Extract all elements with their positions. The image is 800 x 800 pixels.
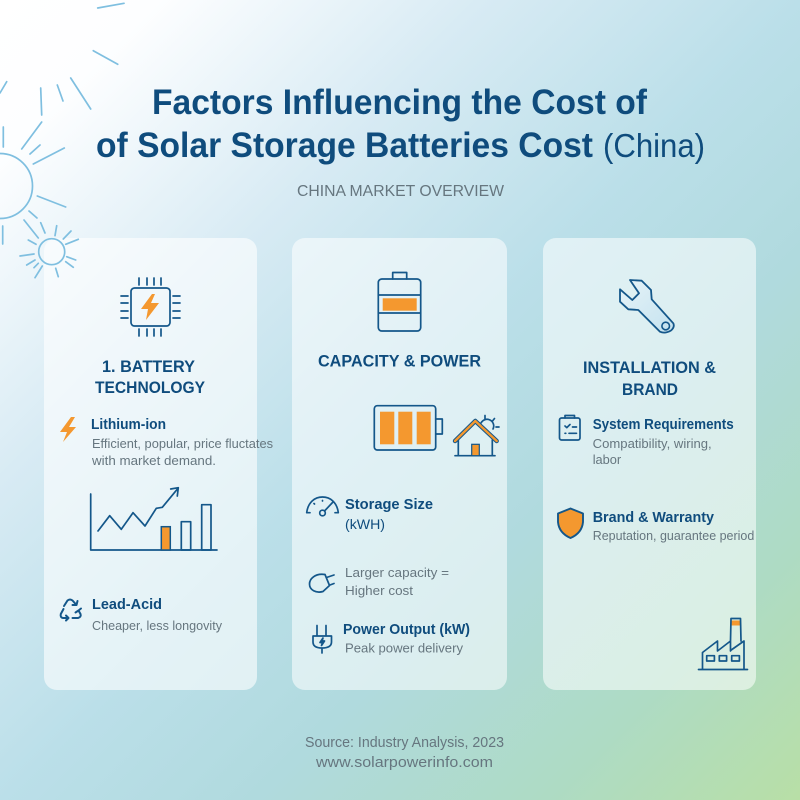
- subtitle: CHINA MARKET OVERVIEW: [297, 183, 505, 200]
- text: system requirements: Compatibility, wiring,: [593, 436, 712, 451]
- icon: house with sun: [455, 416, 499, 456]
- icon: lightning bolt: [60, 417, 76, 442]
- heading: installation and brand: BRAND: [622, 381, 678, 399]
- heading: battery technology: TECHNOLOGY: [95, 379, 205, 397]
- text: lead-acid: Lead-Acid: [92, 596, 162, 613]
- text: power output: Power Output (kW): [343, 621, 470, 638]
- text: lead-acid: Cheaper, less longovity: [92, 618, 222, 633]
- icon: shield: [558, 508, 583, 538]
- icon: gauge: [307, 497, 338, 516]
- heading: installation and brand: INSTALLATION &: [583, 359, 716, 377]
- title: [96, 83, 705, 165]
- text: larger capacity: Larger capacity =: [345, 565, 449, 580]
- text: system requirements: [593, 416, 734, 467]
- panel: capacity and power: [292, 238, 507, 690]
- panel: battery technology: [44, 238, 273, 690]
- icon: power plug: [313, 626, 332, 653]
- icon: clipboard: [560, 416, 580, 440]
- text: lithium-ion: Efficient, popular, price fluctates: [92, 436, 273, 451]
- text: lithium-ion: [91, 416, 273, 468]
- icon: full battery: [374, 406, 442, 450]
- title: Factors Influencing the Cost of: [152, 83, 647, 122]
- icon: plug: [310, 574, 334, 592]
- panel: installation and brand: [543, 238, 756, 690]
- text: system requirements: labor: [593, 452, 622, 467]
- text: larger capacity: Higher cost: [345, 583, 413, 598]
- icon: large sun: [0, 3, 124, 244]
- icon: chip: [121, 278, 180, 336]
- heading: battery technology: 1. BATTERY: [102, 358, 195, 376]
- icon: wrench: [620, 280, 674, 333]
- text: lithium-ion: Lithium-ion: [91, 416, 166, 433]
- chart: price line and bars: [91, 488, 217, 550]
- icon: factory: [698, 618, 748, 670]
- text: lithium-ion: with market demand.: [91, 453, 216, 468]
- text: storage size: [345, 496, 433, 532]
- text: larger capacity: [345, 565, 449, 598]
- icon: recycle: [61, 600, 81, 620]
- footer: source: Source: Industry Analysis, 2023: [305, 735, 504, 751]
- text: power output: Peak power delivery: [345, 640, 463, 656]
- title: of Solar Storage Batteries Cost: [96, 126, 593, 165]
- footer: source: [305, 735, 504, 771]
- text: brand and warranty: Reputation, guarantee period: [593, 528, 754, 543]
- icon: battery: [378, 272, 421, 331]
- heading: battery technology: [95, 358, 205, 397]
- text: storage size: (kWH): [345, 517, 385, 532]
- text: brand and warranty: [593, 509, 754, 543]
- text: power output: [343, 621, 470, 656]
- footer: source: www.solarpowerinfo.com: [315, 754, 493, 771]
- heading: installation and brand: [583, 359, 716, 399]
- text: system requirements: System Requirements: [593, 416, 734, 433]
- heading: capacity and power: CAPACITY & POWER: [318, 352, 481, 370]
- title: (China): [603, 127, 705, 164]
- text: brand and warranty: Brand & Warranty: [593, 509, 715, 526]
- text: lead-acid: [92, 596, 222, 633]
- icon: small sun: [20, 223, 78, 278]
- text: storage size: Storage Size: [345, 496, 433, 513]
